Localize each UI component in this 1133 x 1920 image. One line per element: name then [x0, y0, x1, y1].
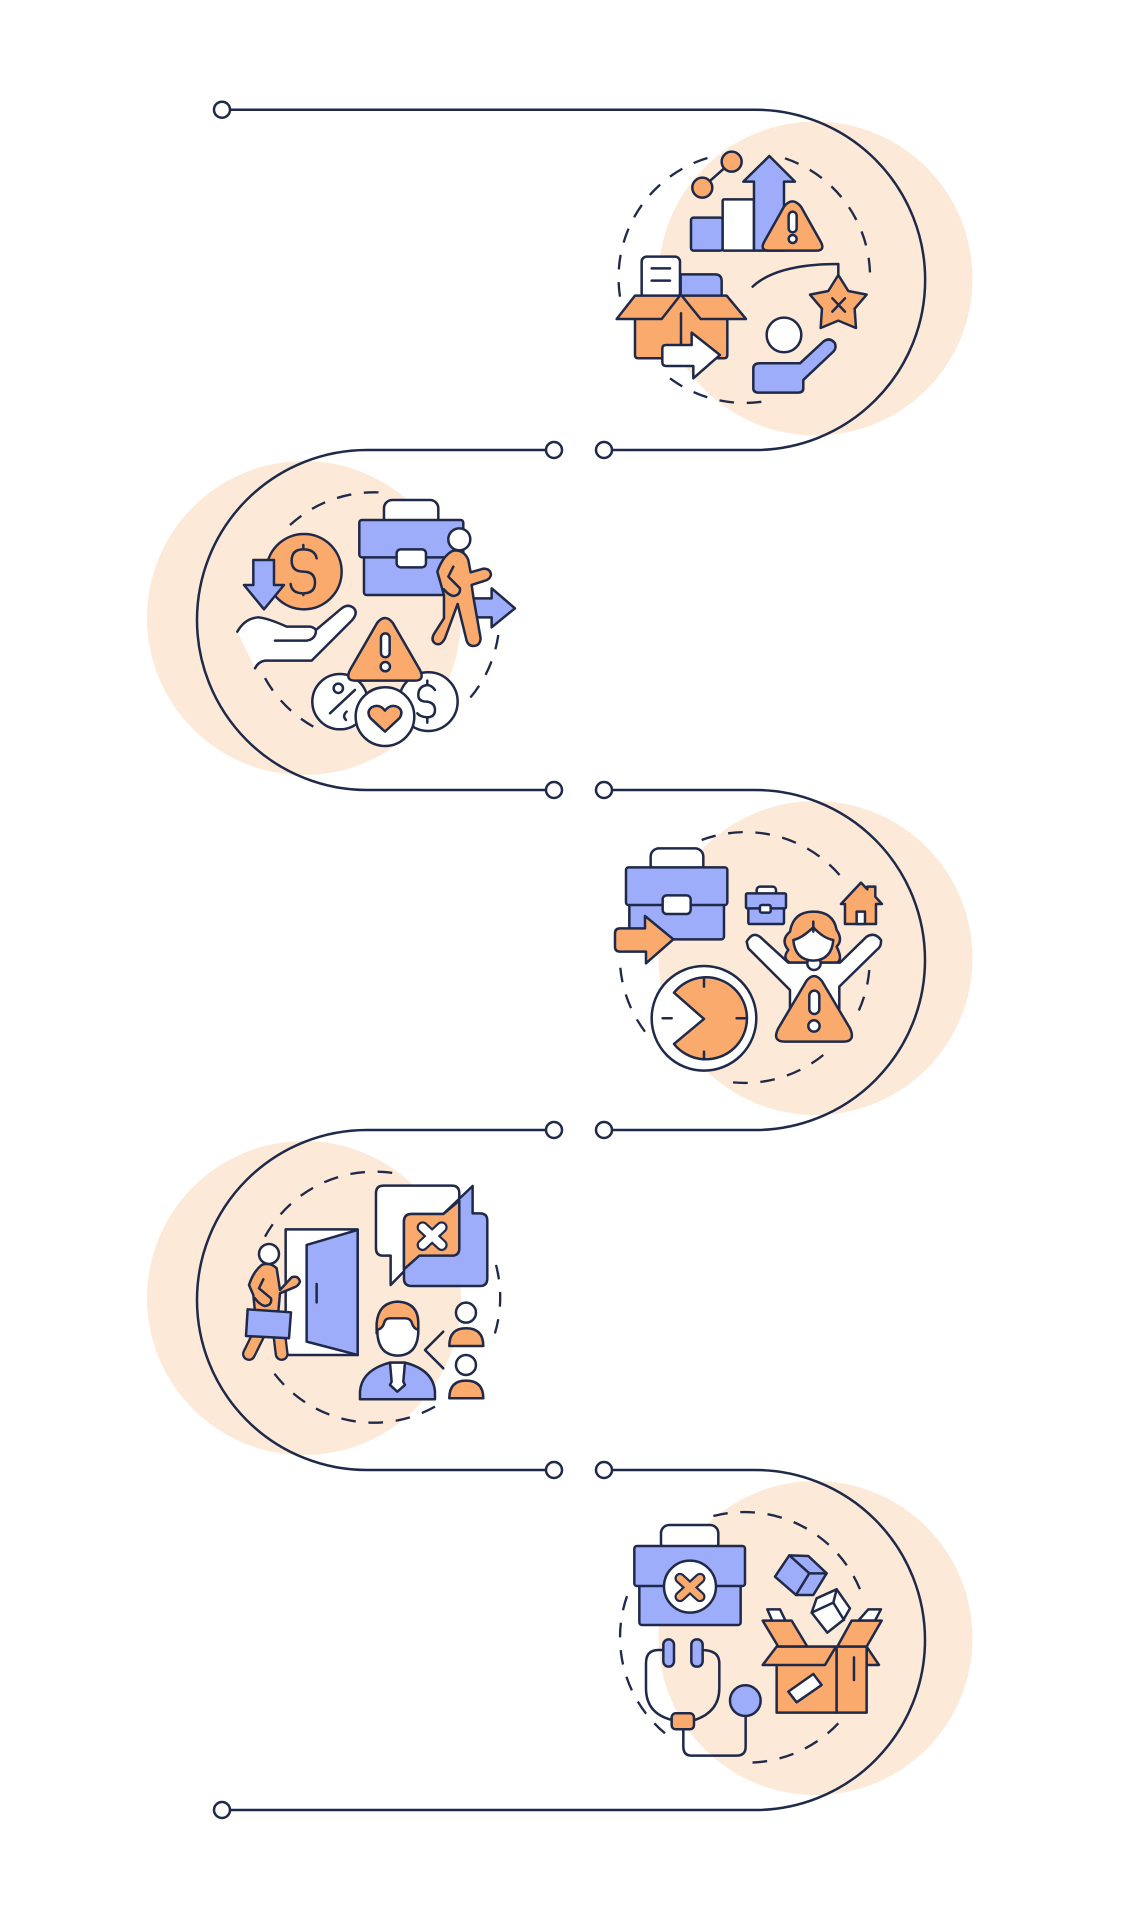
- background circle 1: [658, 122, 972, 436]
- connector dots: [214, 102, 612, 1818]
- icon: briefcase: [359, 500, 463, 595]
- icon: clock: [652, 966, 756, 1071]
- panel 4 icons: leaving work, communication, staff: [246, 1172, 500, 1423]
- panel 5 icons: medical case, stethoscope, boxes: [620, 1512, 882, 1763]
- icon: curve and crossed star: [753, 264, 867, 328]
- icon: blue cube: [775, 1555, 827, 1595]
- background circle 5: [658, 1481, 972, 1795]
- icon: rising bars with arrow: [691, 156, 795, 251]
- icon: percent dollar heart coins with warning: [312, 618, 458, 746]
- icon: small briefcase: [746, 887, 786, 924]
- connector line 1: [230, 110, 925, 450]
- icon: open hand: [237, 606, 356, 668]
- connector line 2: [197, 450, 546, 790]
- icon: house: [841, 883, 882, 924]
- icon: chevron: [425, 1332, 443, 1368]
- background circle 3: [658, 801, 972, 1115]
- icon: warning triangle: [763, 201, 822, 251]
- icon: man in suit: [360, 1302, 435, 1399]
- icon: medical case with cross: [634, 1525, 745, 1625]
- background circle 2: [147, 461, 461, 775]
- icon: briefcase with arrow: [615, 848, 727, 963]
- icon: open cardboard box: [763, 1609, 882, 1713]
- icon: person with raised hand: [753, 318, 836, 393]
- connector line 3: [612, 790, 925, 1130]
- icon: two small people: [449, 1303, 483, 1398]
- icon: open door: [286, 1229, 358, 1355]
- icon: speech bubbles with cross: [376, 1186, 487, 1286]
- icon: person with briefcase: [246, 1244, 300, 1354]
- background circle 4: [147, 1141, 461, 1455]
- connector line 5: [230, 1470, 925, 1810]
- icon: open box with arrow: [617, 257, 746, 378]
- icon: stethoscope: [646, 1639, 761, 1756]
- icon: dollar coin with down arrow: [244, 534, 342, 609]
- icon: white cube: [812, 1589, 850, 1633]
- icon: woman with raised arms: [747, 912, 881, 1010]
- connector line 4: [197, 1130, 546, 1470]
- icon: warning triangle: [776, 976, 852, 1042]
- panel 2 icons: income loss, job, benefits: [237, 492, 515, 746]
- icon: connected dots: [692, 152, 742, 198]
- icon: walking person with arrow: [433, 528, 515, 646]
- panel 1 icons: growth risk, box, lost star: [617, 152, 870, 403]
- panel 3 icons: work-life balance, hours: [615, 832, 882, 1083]
